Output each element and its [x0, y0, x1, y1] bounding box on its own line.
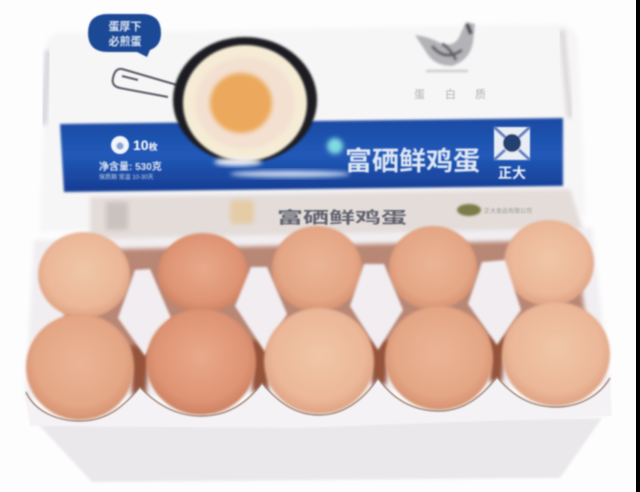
lower lid strip: 正大食品有限公司 — [484, 207, 532, 215]
carton separators — [118, 260, 521, 356]
speech bubble: 必煎蛋 — [108, 34, 142, 48]
tray front face — [38, 418, 602, 482]
brand marks under hen: 蛋 — [414, 88, 425, 101]
carton tray — [25, 228, 610, 400]
icon: frying pan handle — [113, 69, 177, 97]
net weight text: 净含量: 530克 — [99, 160, 162, 173]
icon: water drop with count — [111, 136, 158, 154]
brand marks under hen: 质 — [475, 88, 486, 101]
eggs: back row — [38, 220, 594, 318]
brand marks under hen — [414, 87, 486, 101]
brand logo: 正大 — [498, 165, 526, 181]
scalloped tray rim — [24, 377, 612, 428]
speech bubble — [88, 14, 161, 57]
dark gaps between eggs — [130, 335, 506, 395]
icon: water drop with count: 10枚 — [133, 137, 158, 153]
net weight text: 保质期 常温 10-30天 — [99, 173, 154, 181]
lower lid strip: 富硒鲜鸡蛋 — [277, 208, 407, 227]
eggs: front row — [26, 302, 610, 420]
product name — [327, 138, 480, 176]
speech bubble: 蛋厚下 — [108, 19, 142, 33]
product name: 富硒鲜鸡蛋 — [345, 146, 480, 176]
net weight text — [99, 160, 162, 181]
rim shadow line — [26, 377, 610, 421]
icon: frying pan with egg — [173, 37, 317, 166]
brand marks under hen: 白 — [445, 87, 456, 101]
lower lid strip — [90, 189, 584, 244]
blue product band — [60, 118, 563, 192]
icon: hen illustration — [415, 22, 475, 71]
shaded cups behind eggs — [60, 240, 590, 372]
egg carton lid — [40, 14, 586, 244]
brand logo — [494, 127, 530, 181]
